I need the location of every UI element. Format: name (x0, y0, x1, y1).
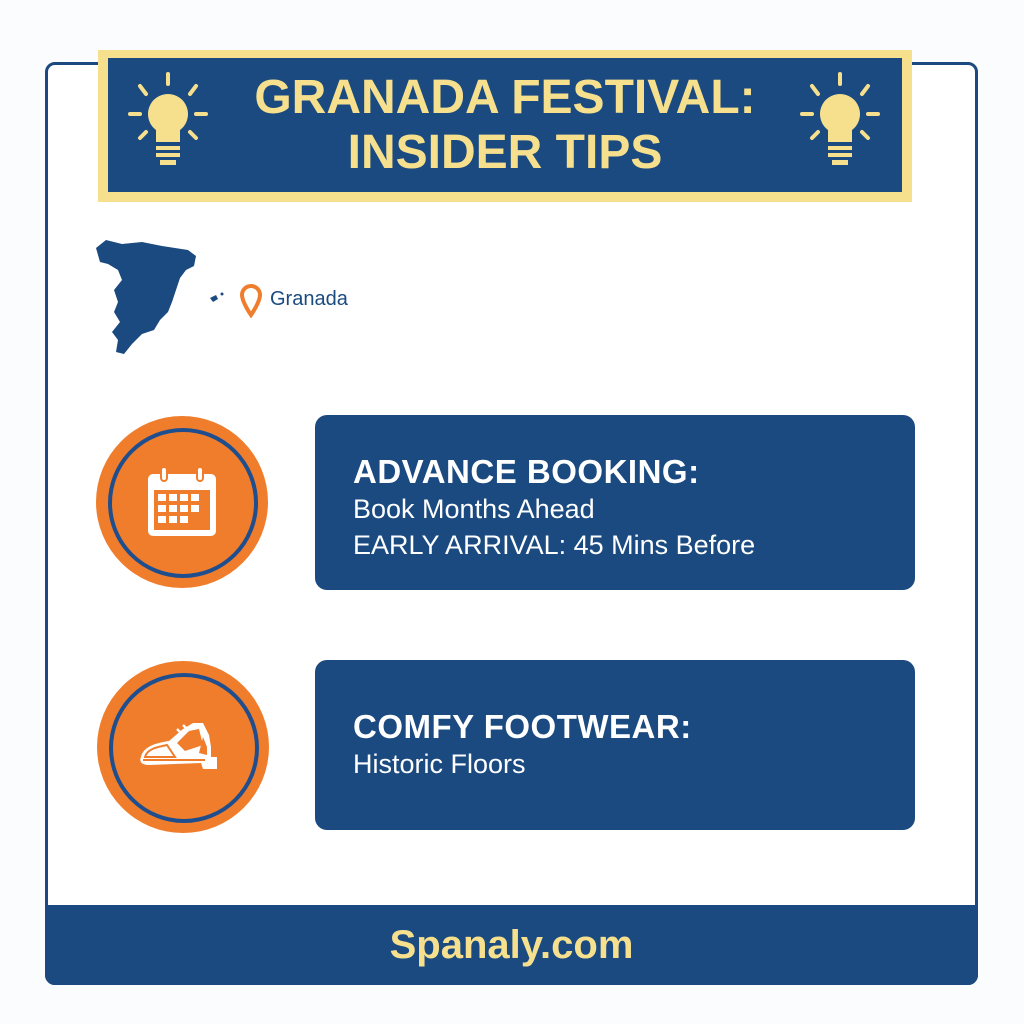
icon: bulb right (800, 72, 880, 165)
card: advance booking: ADVANCE BOOKING: (353, 453, 700, 490)
icon: calendar circle (96, 416, 268, 588)
footer: Spanaly.com (390, 923, 633, 967)
title: GRANADA FESTIVAL: (254, 71, 756, 124)
card: comfy footwear: COMFY FOOTWEAR: (353, 708, 692, 745)
card: comfy footwear: Historic Floors (353, 749, 526, 779)
title (254, 71, 756, 179)
map: Spain (96, 240, 224, 354)
card: advance booking: EARLY ARRIVAL: 45 Mins Before (353, 530, 755, 560)
card: comfy footwear (315, 660, 915, 830)
location pin + label: Granada (270, 288, 348, 310)
card: advance booking: Book Months Ahead (353, 494, 595, 524)
location pin + label (240, 284, 348, 318)
title banner (98, 50, 912, 202)
card: advance booking (315, 415, 915, 590)
icon: shoe circle (97, 661, 269, 833)
icon: bulb left (128, 72, 208, 165)
footer (45, 905, 978, 985)
title: INSIDER TIPS (348, 126, 662, 179)
